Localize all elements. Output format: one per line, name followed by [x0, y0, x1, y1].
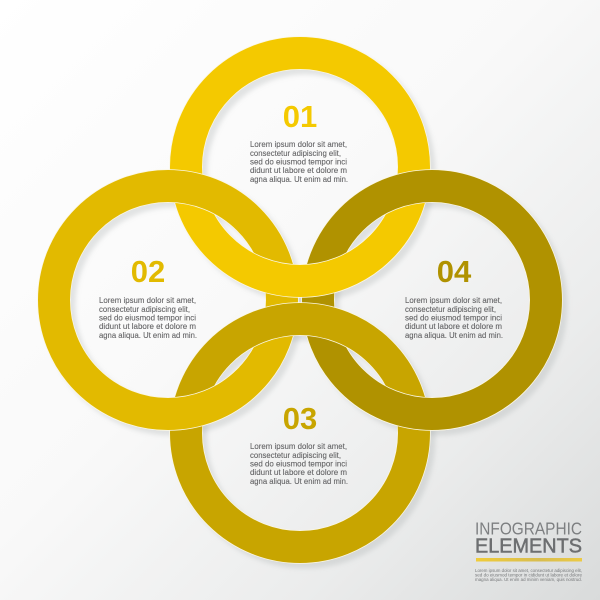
- text block 01: consectetur adipiscing elit,: [250, 148, 341, 158]
- title line 1: INFOGRAPHIC: [475, 518, 582, 538]
- text block 03: consectetur adipiscing elit,: [250, 450, 341, 460]
- text block 04: sed do eiusmod tempor inci: [405, 312, 502, 322]
- text block 03: agna aliqua. Ut enim ad min.: [250, 476, 348, 486]
- text block 03: Lorem ipsum dolor sit amet,: [250, 441, 347, 451]
- text block 04: didunt ut labore et dolore m: [405, 321, 502, 331]
- text block 03: didunt ut labore et dolore m: [250, 467, 347, 477]
- number 04: 04: [437, 254, 472, 289]
- text block 01: didunt ut labore et dolore m: [250, 165, 347, 175]
- small caption: [475, 568, 583, 582]
- text block 02: agna aliqua. Ut enim ad min.: [99, 330, 197, 340]
- small caption: sed do eiusmod tempor in cididunt ut labore et dolore: [475, 572, 583, 578]
- small caption: Lorem ipsum dolor sit amet, consectetur adipiscing elit,: [475, 568, 582, 573]
- text block 01: sed do eiusmod tempor inci: [250, 156, 347, 166]
- text block 02: sed do eiusmod tempor inci: [99, 312, 196, 322]
- text block 04: consectetur adipiscing elit,: [405, 304, 496, 314]
- number 02: 02: [131, 254, 165, 289]
- text block 02: [99, 295, 197, 340]
- small caption: magna aliqua. Ut enim ad minim veniam, quis nostrud.: [475, 577, 582, 582]
- text block 03: sed do eiusmod tempor inci: [250, 458, 347, 468]
- text block 04: [405, 295, 503, 340]
- text block 03: [250, 441, 348, 486]
- title line 2: ELEMENTS: [475, 536, 582, 558]
- section 02: [99, 254, 197, 340]
- ring 02 lower weave: [60, 367, 280, 431]
- ring 01 lower layer: [186, 53, 414, 281]
- ring 04 lower weave: [324, 367, 544, 431]
- number 03: 03: [283, 401, 317, 436]
- text block 02: Lorem ipsum dolor sit amet,: [99, 295, 196, 305]
- number 01: 01: [283, 99, 317, 134]
- accent bar: [476, 558, 582, 562]
- text block 01: Lorem ipsum dolor sit amet,: [250, 139, 347, 149]
- text block 02: didunt ut labore et dolore m: [99, 321, 196, 331]
- section 01: [250, 99, 348, 184]
- ring 01 upper weave: [189, 233, 413, 298]
- ring shadows: [59, 58, 551, 552]
- section 03: [250, 401, 348, 486]
- title block: [475, 518, 583, 582]
- text block 04: Lorem ipsum dolor sit amet,: [405, 295, 502, 305]
- ring 03: [186, 319, 414, 547]
- section 04: [405, 254, 503, 340]
- text block 02: consectetur adipiscing elit,: [99, 304, 190, 314]
- ring 02: [54, 186, 282, 414]
- ring 04: [318, 186, 546, 414]
- text block 01: [250, 139, 348, 184]
- text block 04: agna aliqua. Ut enim ad min.: [405, 330, 503, 340]
- text block 01: agna aliqua. Ut enim ad min.: [250, 174, 348, 184]
